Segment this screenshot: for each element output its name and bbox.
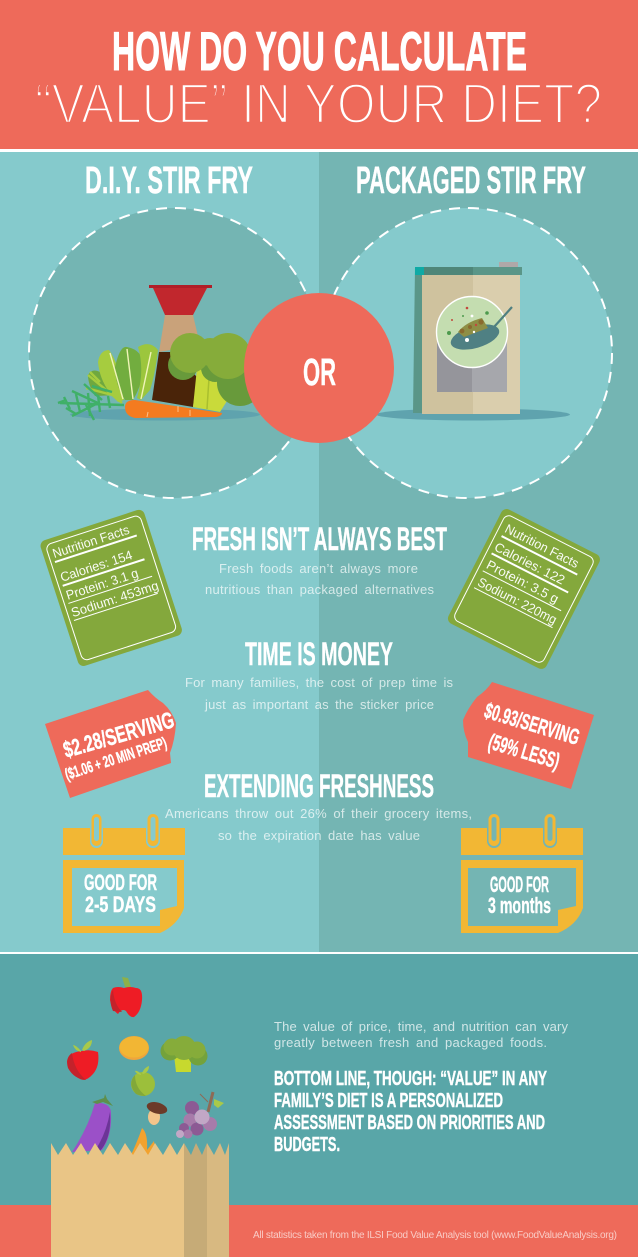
- text block: value summary: [274, 1019, 568, 1050]
- price tag: packaged: [463, 682, 594, 789]
- icon: fresh vegetables and soy sauce: [58, 285, 263, 420]
- footer band: [0, 1205, 638, 1257]
- nutrition label: DIY: Sodium: 453mg: [69, 578, 160, 620]
- footer band: All statistics taken from the ILSI Food Value Analysis tool (www.FoodValueAnalysis.org): [253, 1230, 617, 1241]
- panel: comparison background: [0, 152, 638, 952]
- nutrition label: DIY: Protein: 3.1 g: [64, 565, 140, 603]
- text block: bottom line: FAMILY’S DIET IS A PERSONALIZED: [274, 1089, 503, 1112]
- nutrition label: DIY: Nutrition Facts: [51, 522, 132, 561]
- icon: broccoli: [160, 1036, 208, 1072]
- title banner: [0, 0, 638, 149]
- icon: calendar, good for 3 months: GOOD FOR: [490, 872, 549, 897]
- text block: fresh isn't always best: [192, 521, 447, 597]
- nutrition label: packaged: Nutrition Facts: [502, 521, 582, 571]
- icon: calendar, good for 2-5 days: GOOD FOR: [84, 870, 157, 895]
- price tag: DIY: [45, 690, 177, 798]
- text block: time is money: TIME IS MONEY: [245, 636, 393, 672]
- nutrition label: packaged: Protein: 3.5 g: [484, 557, 561, 606]
- text block: bottom line: BUDGETS.: [274, 1133, 340, 1156]
- text block: time is money: [185, 636, 454, 712]
- icon: lemon: [119, 1036, 149, 1060]
- OR badge: [244, 293, 394, 443]
- text block: value summary: The value of price, time, and nutrition can vary: [274, 1019, 568, 1034]
- nutrition label: DIY: [39, 508, 183, 668]
- text block: extending freshness: EXTENDING FRESHNESS: [204, 768, 434, 804]
- text block: fresh isn't always best: FRESH ISN’T ALWAYS BEST: [192, 521, 447, 557]
- price tag: packaged: (59% LESS): [486, 729, 563, 774]
- text block: fresh isn't always best: nutritious than packaged alternatives: [205, 582, 434, 597]
- icon: red bell pepper: [110, 977, 142, 1017]
- OR badge: OR: [303, 352, 336, 394]
- text block: fresh isn't always best: Fresh foods aren’t always more: [219, 561, 418, 576]
- heading: DIY stir fry: D.I.Y. STIR FRY: [85, 160, 253, 202]
- nutrition label: DIY: Calories: 154: [58, 547, 134, 585]
- nutrition label: packaged: [446, 507, 602, 671]
- text block: extending freshness: Americans throw out 26% of their grocery items,: [165, 806, 472, 821]
- price tag: DIY: ($1.06 + 20 MIN PREP): [63, 735, 169, 784]
- text block: extending freshness: so the expiration date has value: [218, 828, 420, 843]
- dashed circle: DIY: [29, 208, 319, 498]
- icon: calendar, good for 3 months: [461, 813, 583, 933]
- icon: carrot top in bag: [131, 1128, 156, 1156]
- dashed circle: packaged: [322, 208, 612, 498]
- panel: bottom line background: [0, 954, 638, 1205]
- text block: time is money: just as important as the sticker price: [204, 697, 434, 712]
- icon: mushroom: [145, 1100, 169, 1125]
- text block: extending freshness: [165, 768, 472, 843]
- icon: calendar, good for 2-5 days: 2-5 DAYS: [85, 892, 156, 917]
- icon: green apple: [131, 1066, 155, 1096]
- icon: red apple: [67, 1040, 98, 1080]
- icon: calendar, good for 2-5 days: [63, 813, 185, 933]
- price tag: DIY: $2.28/SERVING: [60, 706, 177, 763]
- icon: calendar, good for 3 months: 3 months: [488, 893, 551, 918]
- price tag: packaged: $0.93/SERVING: [482, 698, 583, 750]
- nutrition label: packaged: Sodium: 220mg: [475, 574, 560, 627]
- nutrition label: packaged: Calories: 122: [492, 539, 567, 587]
- text block: time is money: For many families, the cost of prep time is: [185, 675, 454, 690]
- icon: grocery bag: [51, 1143, 229, 1257]
- icon: packaged stir fry box: [376, 262, 570, 420]
- divider rules: [0, 149, 638, 954]
- text block: bottom line: [274, 1067, 547, 1156]
- text block: value summary: greatly between fresh and packaged foods.: [274, 1035, 547, 1050]
- icon: eggplant: [72, 1094, 113, 1153]
- icon: grapes: [176, 1092, 224, 1138]
